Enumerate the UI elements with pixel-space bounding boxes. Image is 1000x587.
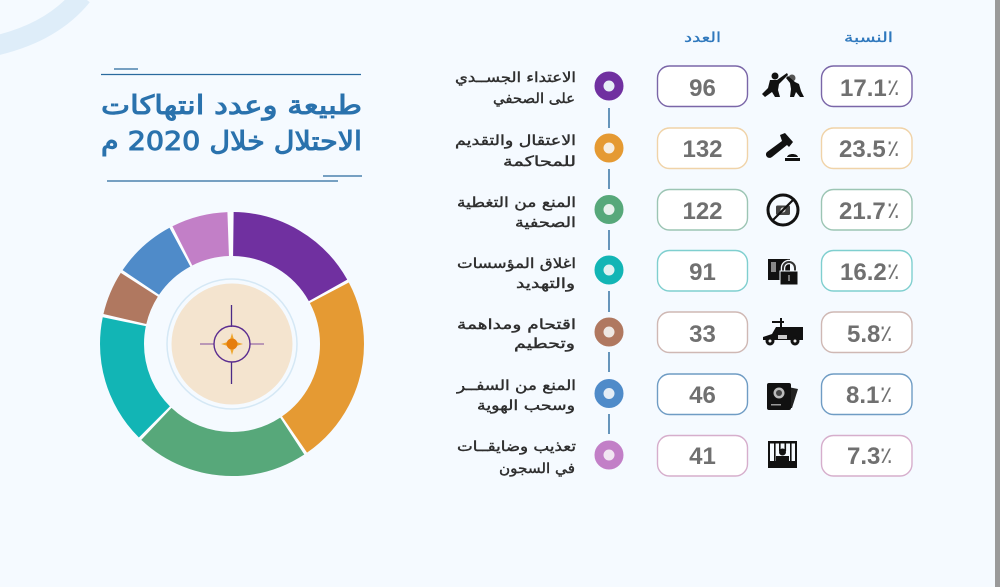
row: raids and destruction: 5.8 [847, 321, 880, 348]
row: torture and prison harassment: في السجون [499, 461, 575, 477]
icon: prisoner behind bars [768, 441, 797, 468]
row: raids and destruction: اقتحام ومداهمة [457, 317, 576, 333]
row: raids and destruction: ٪ [880, 321, 892, 347]
row: banned from coverage: 21.7 [839, 198, 886, 225]
row: closing institutions: والتهديد [516, 276, 575, 292]
donut chart [122, 234, 342, 454]
row: detention and prosecution: ٪ [887, 136, 899, 162]
row: torture and prison harassment [457, 436, 912, 477]
row: banned from coverage [457, 190, 912, 231]
title line 1: طبيعة وعدد انتهاكات [101, 91, 362, 121]
row: banned from coverage: الصحفية [515, 215, 576, 231]
row: physical assault: على الصحفي [493, 91, 575, 107]
icon: no camera [768, 195, 798, 225]
row: physical assault: 96 [689, 75, 716, 102]
row: banned from coverage: المنع من التغطية [457, 195, 576, 211]
row: torture and prison harassment: تعذيب وضايقــات [457, 439, 576, 455]
row: travel ban [456, 374, 912, 414]
row: raids and destruction: وتحطيم [514, 336, 575, 352]
row: banned from coverage: ٪ [887, 198, 899, 224]
row: travel ban: 46 [689, 382, 716, 409]
row: physical assault [455, 66, 912, 107]
row: travel ban: ٪ [880, 382, 892, 408]
row: detention and prosecution: للمحاكمة [503, 154, 576, 170]
row: raids and destruction [457, 312, 912, 352]
row: travel ban: المنع من السفــر [456, 378, 576, 394]
row: detention and prosecution: 23.5 [839, 136, 886, 163]
row: torture and prison harassment: ٪ [880, 443, 892, 469]
donut centre target [167, 279, 297, 409]
row: physical assault: ٪ [887, 75, 899, 101]
column heading: count: العدد [684, 30, 721, 46]
row: closing institutions [457, 250, 912, 292]
icon: military jeep [763, 318, 803, 346]
title block [101, 69, 362, 181]
row: detention and prosecution: الاعتقال والتقديم [455, 133, 576, 149]
icon: passport [767, 383, 798, 410]
row: raids and destruction: 33 [689, 321, 716, 348]
icon: building with padlock [768, 259, 798, 285]
row: torture and prison harassment: 41 [689, 443, 716, 470]
row: closing institutions: اغلاق المؤسسات [457, 256, 576, 272]
row: closing institutions: 16.2 [840, 259, 887, 286]
title line 2: الاحتلال خلال 2020 م [101, 127, 362, 157]
row: banned from coverage: 122 [682, 198, 723, 225]
row: torture and prison harassment: 7.3 [847, 443, 880, 470]
row: physical assault: 17.1 [840, 75, 887, 102]
timeline connectors [608, 108, 610, 434]
icon: gavel [766, 133, 800, 161]
row: detention and prosecution [455, 128, 912, 170]
row: detention and prosecution: 132 [682, 136, 723, 163]
row: closing institutions: 91 [689, 259, 716, 286]
icon: two fighters [762, 72, 804, 97]
column heading: percentage: النسبة [844, 30, 893, 46]
row: travel ban: وسحب الهوية [477, 398, 575, 414]
row: travel ban: 8.1 [846, 382, 879, 409]
row: closing institutions: ٪ [887, 259, 899, 285]
row: physical assault: الاعتداء الجســدي [455, 70, 576, 86]
